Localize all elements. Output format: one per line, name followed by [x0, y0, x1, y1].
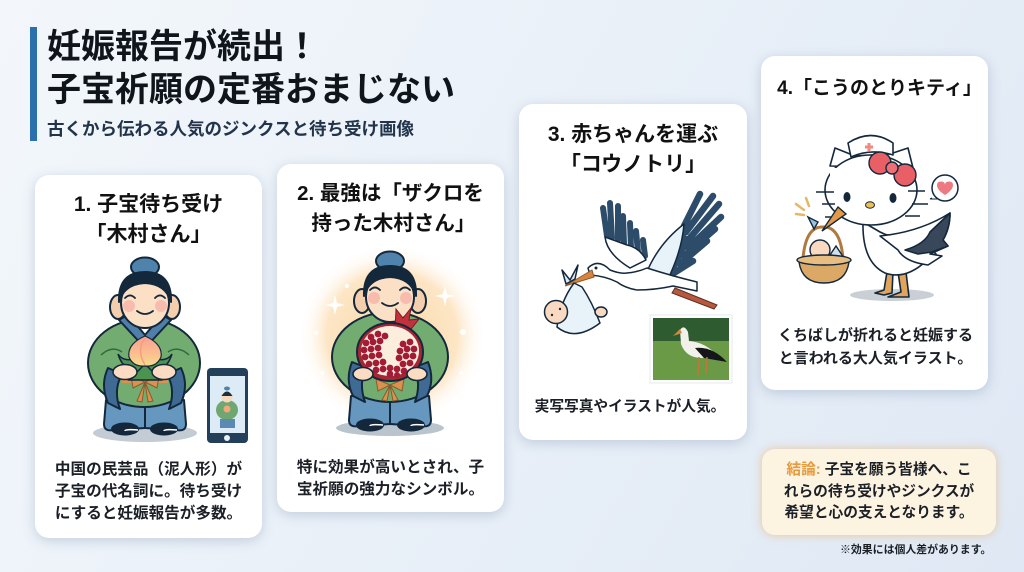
subtitle: 古くから伝わる人気のジンクスと待ち受け画像 — [47, 119, 414, 139]
conclusion text: れらの待ち受けやジンクスが — [784, 484, 974, 500]
footnote: ※効果には個人差があります。 — [840, 544, 991, 556]
card 4 body text: くちばしが折れると妊娠する — [778, 327, 973, 344]
card 2 heading: 2. 最強は「ザクロを — [297, 182, 484, 205]
card 2 heading: 持った木村さん」 — [311, 212, 475, 234]
speech bubble with heart — [930, 175, 958, 201]
illustration: stork Hello Kitty with basket — [794, 134, 959, 301]
panel: card 3 — [519, 104, 747, 440]
heading: 子宝祈願の定番おまじない — [47, 71, 455, 109]
conclusion text: 希望と心の支えとなります。 — [784, 505, 974, 521]
title block — [30, 27, 455, 141]
card 1 body text: 中国の民芸品（泥人形）が — [55, 461, 242, 478]
accent bar — [30, 27, 37, 141]
card 4 body text — [778, 327, 973, 367]
illustration: Kimura-san with pomegranate — [308, 250, 476, 436]
illustration: Kimura-san with peach and phone — [87, 256, 248, 443]
card 1 body text: にすると妊娠報告が多数。 — [55, 505, 242, 522]
card 1 body text: 子宝の代名詞に。待ち受け — [55, 483, 242, 500]
card 1 heading: 1. 子宝待ち受け — [74, 193, 223, 216]
near wing — [646, 194, 721, 279]
card 1 heading: 「木村さん」 — [86, 222, 212, 246]
illustration: stork carrying baby — [544, 190, 732, 384]
card 2 body text: 特に効果が高いとされ、子 — [297, 459, 484, 476]
card 3 heading: 「コウノトリ」 — [560, 152, 706, 176]
panel: card 4 — [761, 56, 988, 390]
card 3 heading — [548, 123, 718, 176]
photo of stork — [650, 315, 732, 383]
card 2 heading — [297, 182, 484, 234]
card 2 body text — [297, 458, 484, 498]
card 2 body text: 宝祈願の強力なシンボル。 — [297, 481, 484, 498]
card 3 heading: 3. 赤ちゃんを運ぶ — [548, 123, 718, 146]
conclusion text — [784, 461, 974, 521]
card 3 body text: 実写写真やイラストが人気。 — [535, 399, 725, 415]
card 4 heading: 4.「こうのとりキティ」 — [777, 78, 982, 99]
pomegranate — [353, 308, 427, 381]
card 1 heading — [74, 192, 223, 246]
heading — [47, 28, 455, 109]
card 1 body text — [55, 460, 242, 522]
callout: conclusion — [762, 449, 996, 535]
conclusion text: 結論: 子宝を願う皆様へ、こ — [786, 462, 972, 478]
panel: card 2 — [277, 164, 504, 512]
heading: 妊娠報告が続出！ — [47, 28, 319, 66]
card 4 body text: と言われる大人気イラスト。 — [779, 350, 972, 367]
icon: phone wallpaper — [207, 368, 248, 443]
far wing — [603, 203, 646, 268]
basket with baby — [797, 207, 851, 283]
panel: card 1 — [35, 175, 262, 538]
